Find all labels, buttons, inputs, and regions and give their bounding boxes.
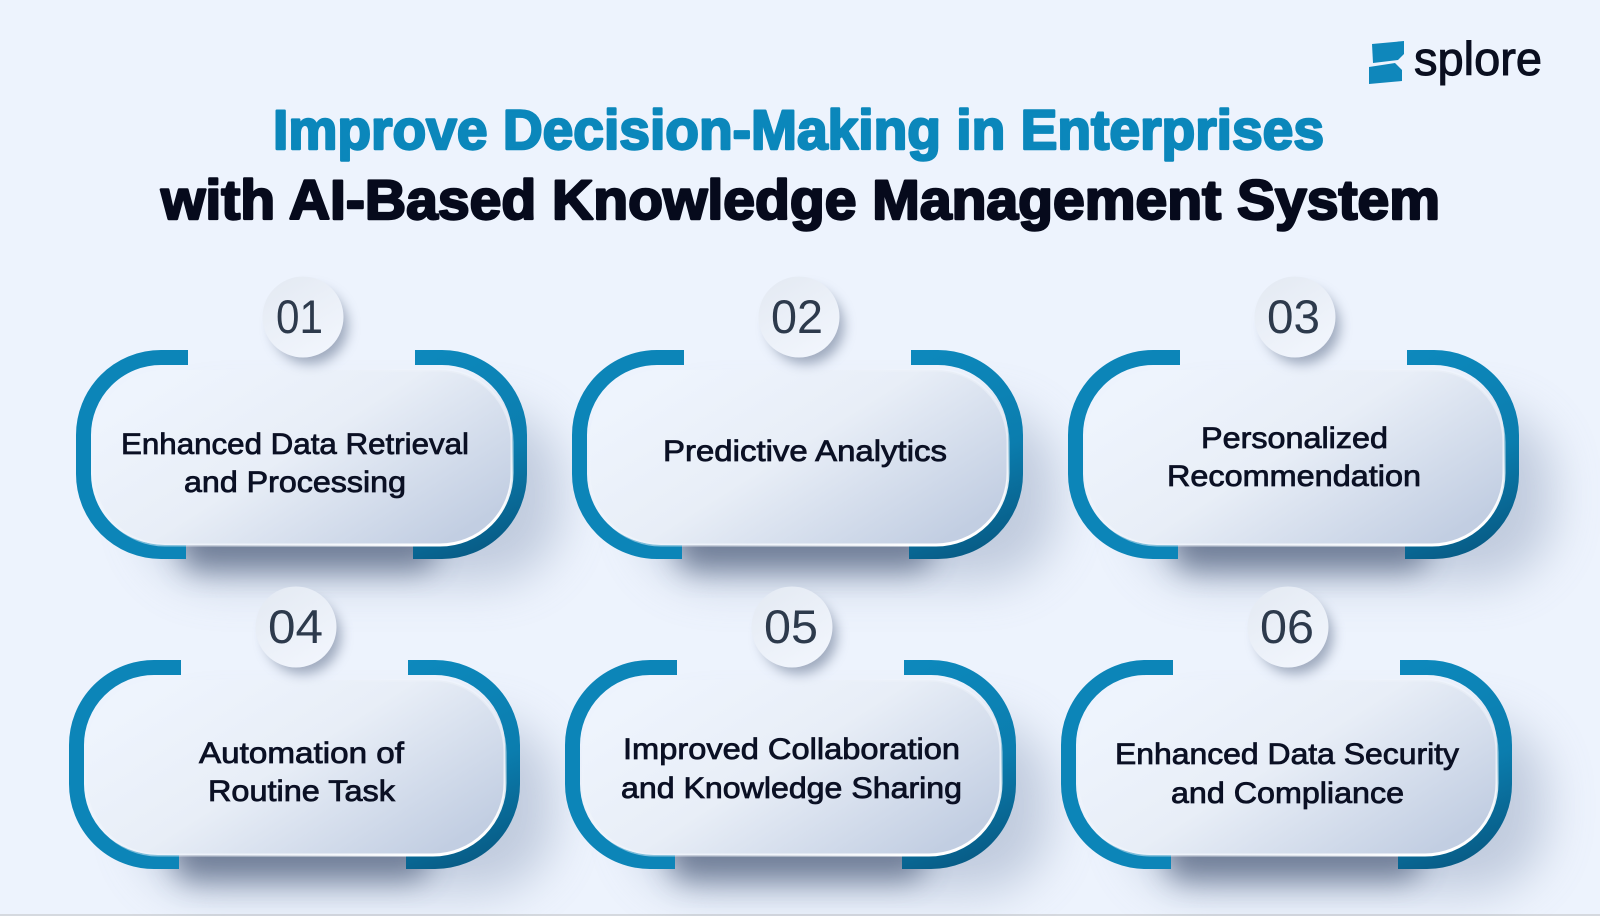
- number badge 03: 03: [1267, 290, 1320, 343]
- bottom edge strip: [0, 914, 1600, 916]
- panel: 05 Improved Collaboration and Knowledge Sharing: [572, 586, 1050, 892]
- card frame 04: [76, 668, 554, 892]
- card text 01: [121, 428, 469, 499]
- card frame 03: [1076, 358, 1553, 582]
- card text 04: Routine Task: [208, 775, 396, 808]
- number badge 05: 05: [764, 600, 818, 653]
- number badge 02: 02: [771, 290, 823, 343]
- panel: 04 Automation of Routine Task: [76, 586, 554, 892]
- card text 01: Enhanced Data Retrieval: [121, 428, 469, 461]
- number badge 05: [752, 586, 837, 674]
- number badge 04: 04: [268, 600, 323, 653]
- card text 05: and Knowledge Sharing: [621, 772, 962, 805]
- card text 06: [1115, 738, 1459, 810]
- card text 03: Personalized: [1201, 422, 1388, 455]
- panel: 02 Predictive Analytics: [580, 276, 1057, 582]
- title line 2: with AI-Based Knowledge Management System: [160, 168, 1440, 231]
- card text 02: Predictive Analytics: [663, 435, 947, 468]
- card frame 06: [1068, 668, 1546, 892]
- card text 06: Enhanced Data Security: [1115, 738, 1459, 771]
- card text 04: Automation of: [199, 737, 405, 770]
- panel: 01 Enhanced Data Retrieval and Processing: [84, 276, 561, 582]
- number badge 01: 01: [276, 290, 323, 343]
- panel: 03 Personalized Recommendation: [1076, 276, 1553, 582]
- card text 06: and Compliance: [1171, 777, 1404, 810]
- title: [160, 98, 1440, 231]
- number badge 06: [1248, 586, 1333, 674]
- card text 01: and Processing: [184, 466, 406, 499]
- card frame 01: [84, 358, 561, 582]
- number badge 01: [262, 276, 348, 364]
- card text 04: [199, 737, 405, 808]
- card text 05: [621, 733, 962, 805]
- card text 03: [1167, 422, 1421, 493]
- number badge 06: 06: [1260, 600, 1314, 653]
- title line 1: Improve Decision-Making in Enterprises: [273, 98, 1324, 161]
- number badge 03: [1254, 276, 1340, 364]
- card frame 02: [580, 358, 1057, 582]
- logo: splore: splore: [1414, 32, 1542, 85]
- card text 03: Recommendation: [1167, 460, 1421, 493]
- number badge 04: [256, 586, 341, 674]
- card text 05: Improved Collaboration: [623, 733, 960, 766]
- number badge 02: [758, 276, 844, 364]
- card frame 05: [572, 668, 1050, 892]
- panel: 06 Enhanced Data Security and Compliance: [1068, 586, 1546, 892]
